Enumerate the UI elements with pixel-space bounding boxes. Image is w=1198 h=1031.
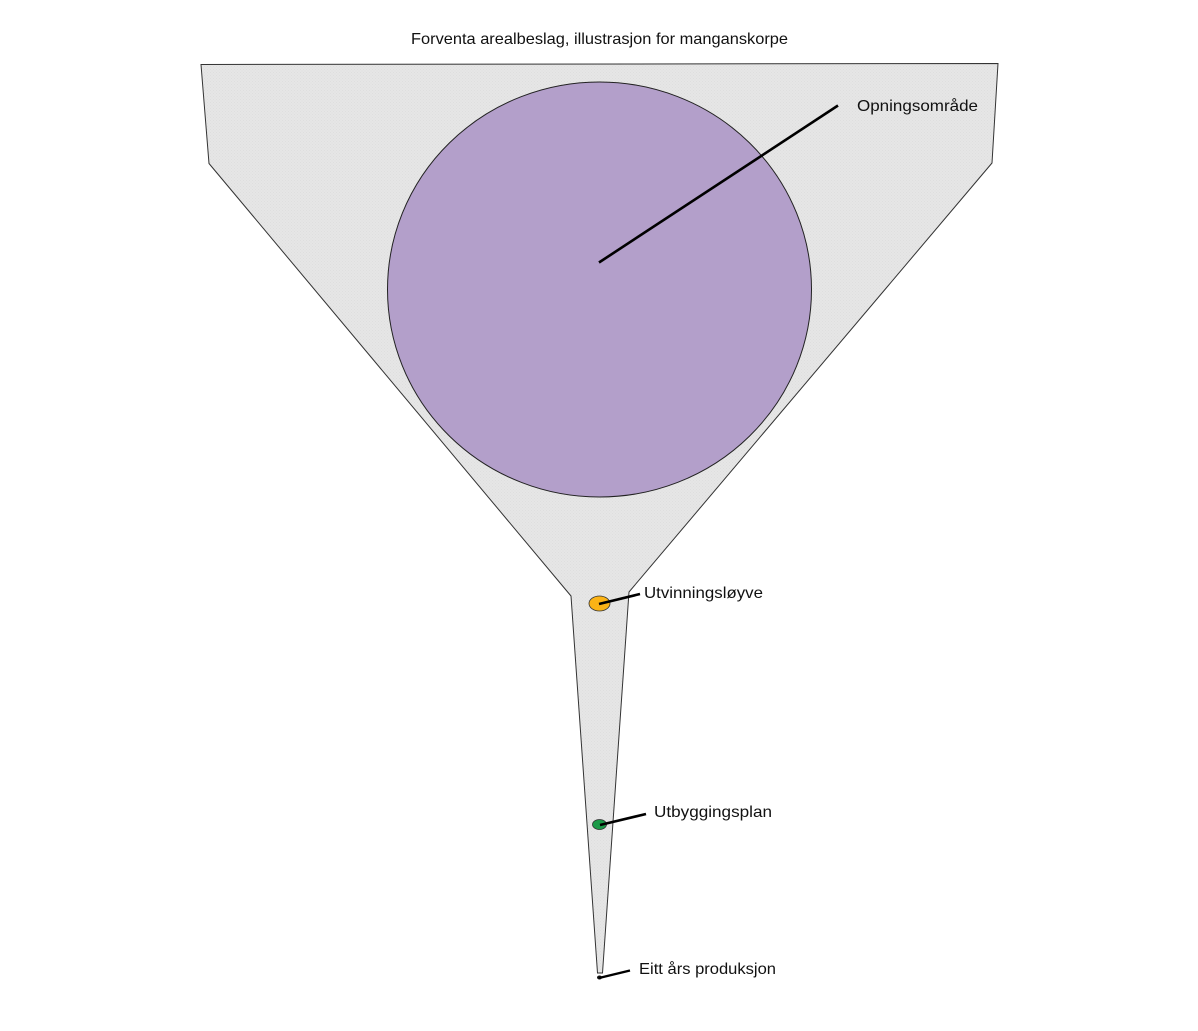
title: Forventa arealbeslag, illustrasjon for manganskorpe xyxy=(411,31,788,48)
callout: opening area: Opningsområde xyxy=(857,97,978,115)
callout: one year of production xyxy=(597,960,776,980)
callout: development plan: Utbyggingsplan xyxy=(654,804,772,821)
circle: opening area xyxy=(388,82,812,497)
callout: one year of production: Eitt års produksjon xyxy=(639,960,776,978)
callout: opening area xyxy=(599,97,978,262)
callout: extraction licence xyxy=(589,585,763,611)
callout: extraction licence: Utvinningsløyve xyxy=(644,585,763,602)
funnel: expected area use xyxy=(201,64,998,973)
callout: development plan xyxy=(592,804,772,830)
